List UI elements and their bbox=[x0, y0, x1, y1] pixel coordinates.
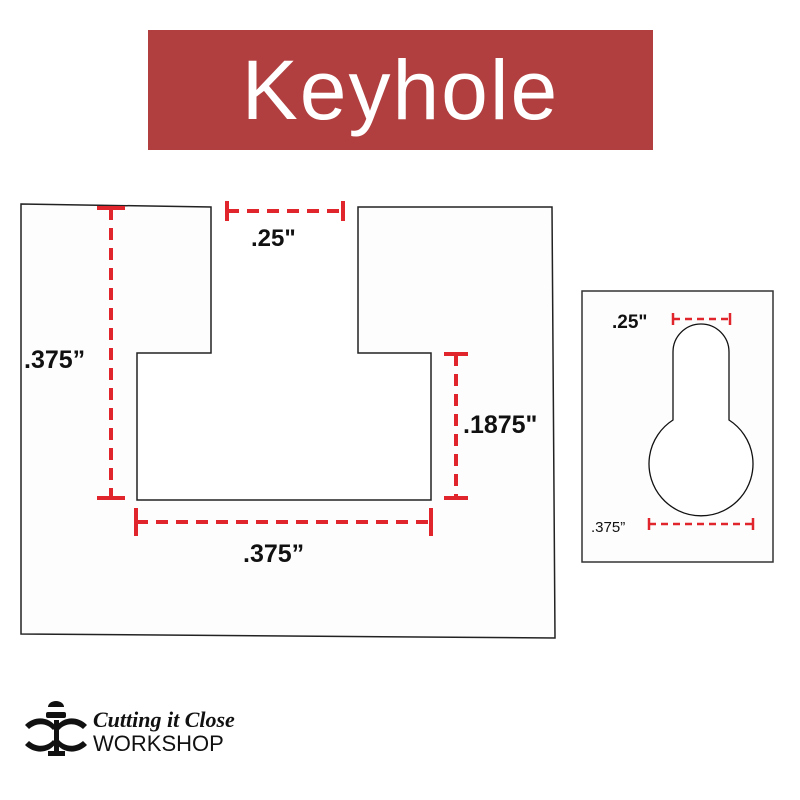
dimension: .375 horizontal bbox=[136, 508, 431, 536]
logo text bbox=[93, 707, 235, 756]
panel: large keyhole cross-section: .1875" bbox=[463, 411, 537, 439]
dimension: .1875 vertical bbox=[444, 354, 468, 498]
panel: keyhole shape bbox=[582, 291, 773, 562]
logo text: Cutting it Close bbox=[93, 707, 235, 732]
panel: large keyhole cross-section: .375” bbox=[24, 346, 85, 374]
panel: large keyhole cross-section bbox=[21, 201, 555, 638]
panel: large keyhole cross-section: .375” bbox=[243, 540, 304, 568]
panel: large keyhole cross-section: .25" bbox=[251, 225, 296, 252]
dimension: .25 horizontal bbox=[227, 201, 343, 221]
logo icon bbox=[25, 701, 87, 756]
dimension: .375 vertical bbox=[97, 208, 125, 498]
title: Keyhole bbox=[242, 43, 559, 137]
panel: keyhole shape: .375” bbox=[591, 519, 625, 536]
panel: keyhole shape: .25" bbox=[612, 312, 647, 333]
title bbox=[148, 30, 653, 150]
logo text: WORKSHOP bbox=[93, 731, 224, 756]
